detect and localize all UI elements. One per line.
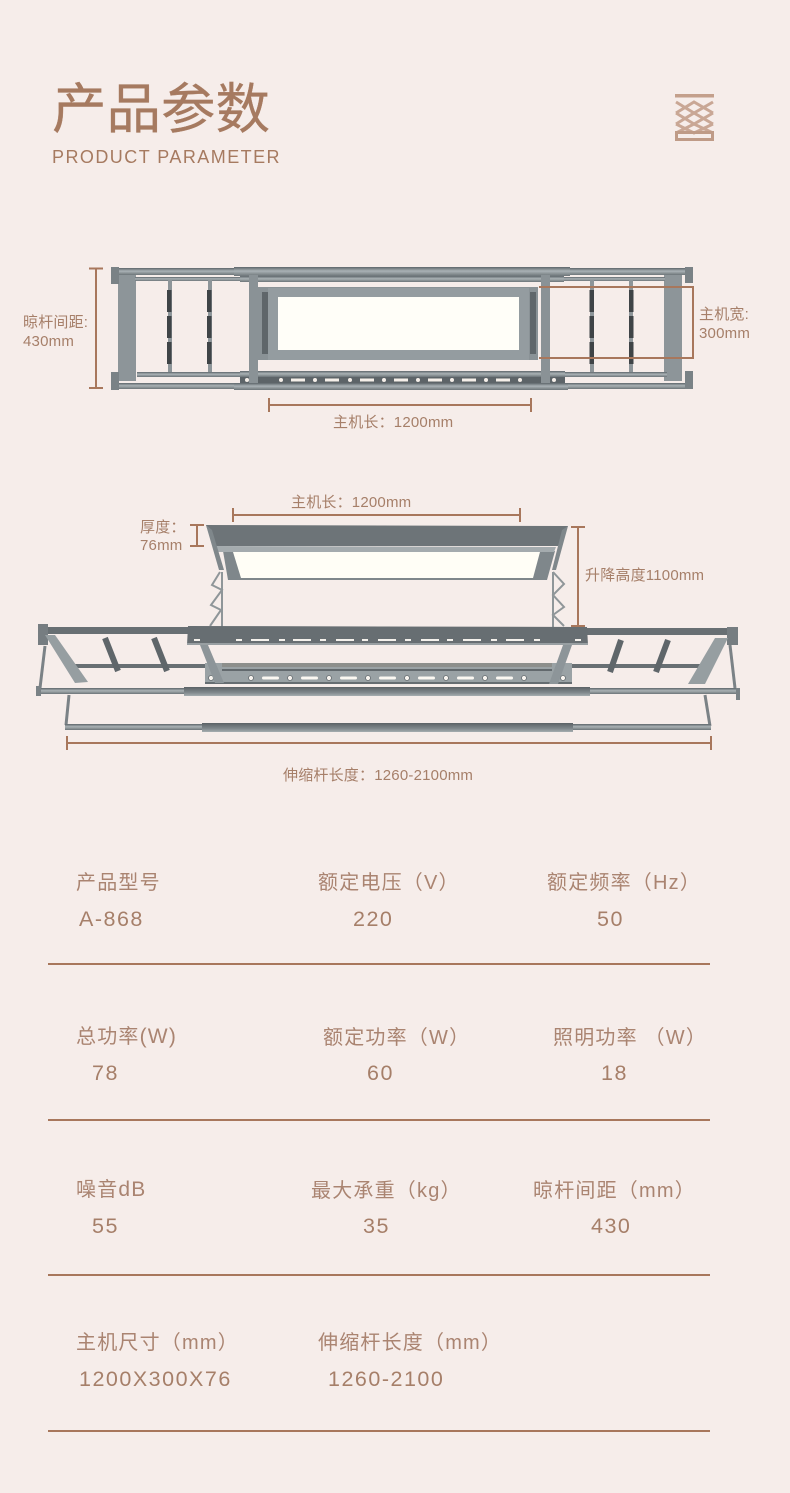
dimension: host length perspective [233,508,520,522]
lower telescopic bar [65,723,711,732]
spec row 2: 照明功率 （W） [553,1026,707,1049]
spec row 3: 最大承重（kg） [311,1179,462,1202]
spec row 2: 60 [367,1061,394,1085]
end brackets [45,635,88,683]
spec row 2: 额定功率（W） [323,1026,470,1049]
vertical arms [40,645,735,726]
dimension: rack spacing [89,268,103,388]
dimension: host length top [269,398,531,412]
label: host length perspective: 主机长：1200mm [291,494,411,511]
diagram: perspective view of drying rack [36,525,740,732]
label: rack spacing: 430mm [23,333,74,350]
icon: scissor lift [675,94,714,140]
spec row 2 [76,1025,707,1085]
title: 产品参数 [52,79,270,140]
rungs with hinges [167,280,634,372]
top outer rail [112,268,692,275]
bottom rails [137,372,667,377]
right bracket [664,275,682,381]
label: host length top: 主机长：1200mm [333,414,453,431]
dimension: lift height [571,527,585,626]
spec row 2: 78 [92,1061,119,1085]
spec row 2: 总功率(W) [76,1025,177,1048]
label: host width: 主机宽: [699,306,749,323]
dimension: host width box [539,287,693,358]
spec row 3: 430 [591,1214,631,1238]
angled rungs [105,638,668,672]
side rails [46,627,188,634]
left bracket [118,275,136,381]
host panel with light [258,287,538,360]
dimension: telescopic length [67,736,711,750]
spec row 3: 35 [363,1214,390,1238]
dimension: thickness [190,525,204,546]
label: host width: 300mm [699,325,750,342]
label: telescopic length: 伸缩杆长度：1260-2100mm [283,767,473,784]
spec row 4: 1200X300X76 [79,1367,232,1391]
spec row 3 [76,1178,696,1238]
spec row 1: 额定电压（V） [318,871,460,894]
title [52,79,281,167]
front telescopic bar [36,686,740,700]
upper housing [223,551,555,580]
scissor arms [210,572,564,630]
spec row 4: 主机尺寸（mm） [76,1331,239,1354]
spec row 4: 1260-2100 [328,1367,444,1391]
middle plate [205,663,572,684]
support legs [200,645,224,683]
spec row 4 [76,1331,502,1391]
spec row 3: 噪音dB [76,1178,146,1201]
diagram: top view of drying rack [111,267,693,390]
spec row 3: 晾杆间距（mm） [533,1179,696,1202]
spec row 1: 50 [597,907,624,931]
rear rods [73,664,208,668]
perforated plate [240,371,565,384]
spec row 1: 产品型号 [76,871,161,894]
spec row 1: 额定频率（Hz） [547,871,701,894]
label: rack spacing: 晾杆间距: [23,314,88,331]
spec row 1 [76,871,701,931]
spec row 2: 18 [601,1061,628,1085]
spec row 1: 220 [353,907,393,931]
lower housing [187,626,588,645]
spec row 1: A-868 [79,907,144,931]
label: thickness: 76mm [140,537,182,554]
spec row 4: 伸缩杆长度（mm） [318,1331,502,1354]
label: lift height: 升降高度1100mm [585,567,704,584]
label: thickness: 厚度： [140,519,186,536]
vertical posts [249,275,258,383]
subtitle: PRODUCT PARAMETER [52,147,281,167]
spec row 3: 55 [92,1214,119,1238]
